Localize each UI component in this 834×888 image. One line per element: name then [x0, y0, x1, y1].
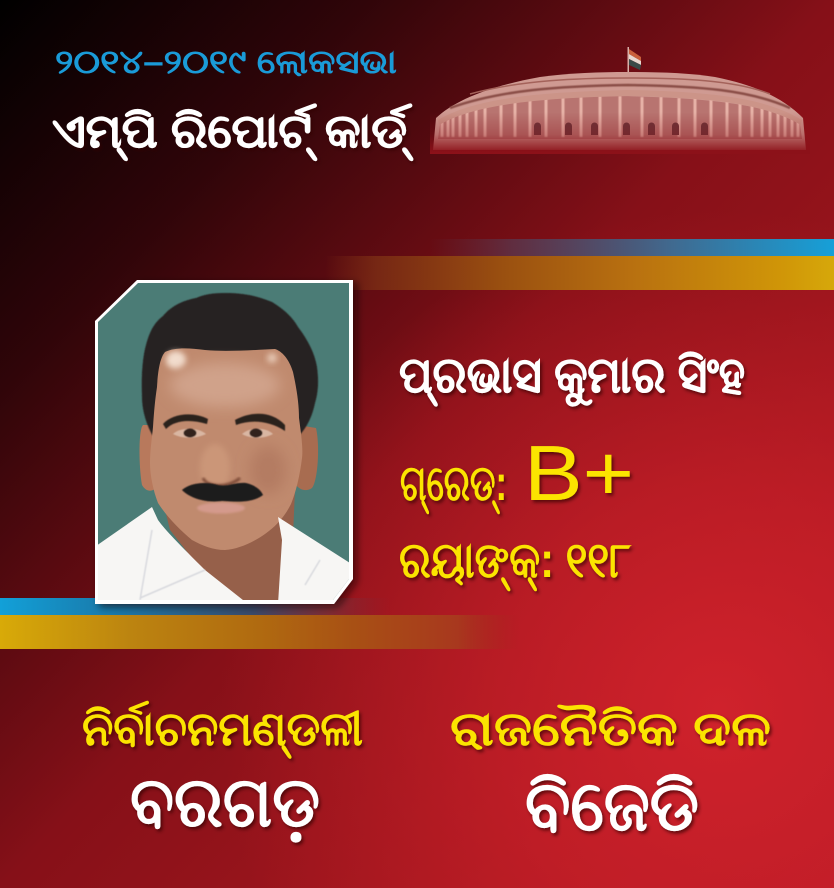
title: MP report card: ଏମ୍‌ପି ରିପୋର୍ଟ୍ କାର୍ଡ୍ — [52, 103, 414, 161]
entablature bands — [438, 90, 802, 125]
skin highlights — [166, 351, 286, 494]
bottom decorative band — [0, 598, 520, 649]
portrait photo frame — [90, 275, 360, 610]
icon: parliament building — [430, 47, 810, 154]
wall behind columns — [438, 96, 802, 139]
rank: ରୟାଙ୍କ୍: ୧୧୮ — [399, 532, 633, 592]
nose — [203, 478, 240, 486]
eyes — [173, 428, 273, 438]
value: party name: ବିଜେଡି — [525, 767, 699, 845]
lips — [197, 502, 245, 514]
moustache — [182, 483, 263, 502]
ears — [140, 425, 154, 491]
columns — [442, 96, 798, 137]
label: constituency: ନିର୍ବାଚନମଣ୍ଡଳୀ — [82, 701, 363, 759]
arched windows — [534, 122, 708, 135]
top decorative band — [325, 239, 834, 290]
portrait illustration — [98, 283, 349, 600]
label: political party: ରାଜନୈତିକ ଦଳ — [450, 703, 771, 756]
grade value: B+ — [524, 429, 634, 517]
flag — [628, 47, 641, 75]
eyebrows — [163, 414, 208, 429]
shirt — [96, 507, 248, 604]
value: constituency name: ବରଗଡ଼ — [130, 763, 320, 844]
candidate name: ପ୍ରଭାସ କୁମାର ସିଂହ — [399, 347, 745, 407]
neck — [166, 493, 295, 600]
hair — [142, 293, 318, 440]
heading: term years: ୨୦୧୪–୨୦୧୯ ଲୋକସଭା — [55, 43, 397, 80]
face — [150, 348, 302, 550]
grade label: ଗ୍ରେଡ୍: — [400, 455, 507, 515]
dome body — [433, 72, 806, 150]
